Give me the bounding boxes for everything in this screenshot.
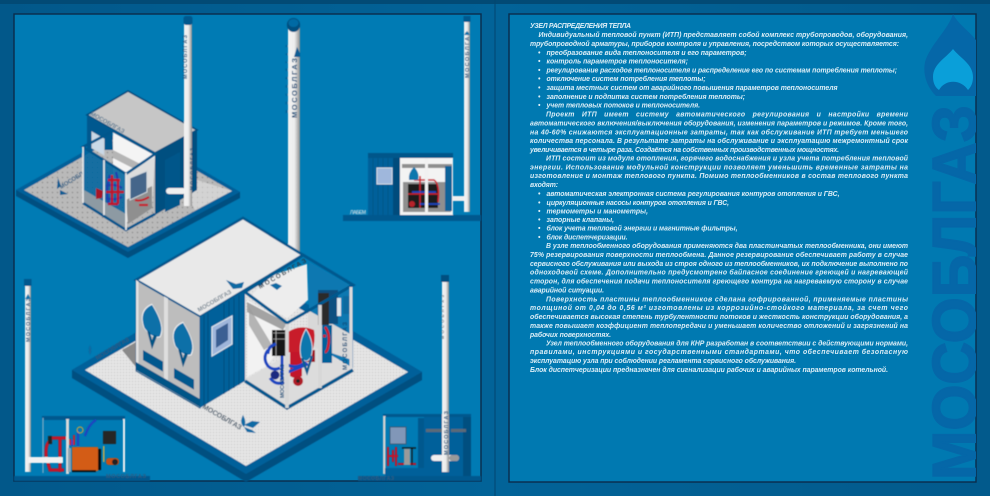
list: functions: • <box>538 68 541 74</box>
list: components: циркуляционные насосы контуров отопления и ГВС, <box>546 200 729 207</box>
large chimney <box>285 18 300 252</box>
building roof <box>136 218 303 317</box>
paragraph: project: Проект ИТП имеет систему автоматического регулирования и настройки времени <box>546 110 909 118</box>
list: functions: • <box>538 102 541 110</box>
paragraph: plates: толщиной от 0,04 до 0,56 м² изготовлены из коррозийно-стойкого материала, за счет чего <box>530 304 908 312</box>
paragraph: plates: обеспечивается высокая степень турбулентности потоков и жесткость конструкции оборудования, а <box>530 313 908 321</box>
paragraph: project <box>529 110 909 154</box>
paragraph: exchangers: сторон, для обеспечения подачи теплоносителя греющего контура на нагреваемую сторону в случае <box>530 278 908 286</box>
body text <box>529 23 909 374</box>
paragraph: intro: Индивидуальный тепловой пункт (ИТП) представляет собой комплекс трубопроводов, оборудования, <box>538 31 908 39</box>
side view: bottom left <box>14 279 150 481</box>
list: components: термометры и манометры, <box>546 208 648 215</box>
paragraph: project: автоматического включения/выключения оборудования, изменения параметров и режимов. Кроме того, <box>530 120 908 128</box>
list: functions: регулирование расходов теплоносителя и распределение его по системам потребления теплоты; <box>546 66 897 74</box>
side view: bottom right <box>358 275 481 482</box>
title: УЗЕЛ РАСПРЕДЕЛЕНИЯ ТЕПЛА <box>530 23 631 30</box>
list: functions: • <box>538 76 541 83</box>
small chimney with stub <box>166 16 194 206</box>
logo drop on equipment <box>300 329 312 361</box>
list: components: запорные клапаны, <box>546 217 614 224</box>
boiler <box>72 431 119 472</box>
large isometric unit <box>72 218 422 482</box>
list: functions: защита местных систем от аварийного повышения параметров теплоносителя <box>546 84 838 92</box>
list: functions: • <box>538 94 541 101</box>
paragraph: project: на 40-60% снижаются эксплуатационные затраты, так как обслуживание ИТП требует меньшего <box>530 128 908 136</box>
paragraph: composition: энергии. Использование модульной конструкции позволяет уменьшить временные затраты на <box>530 164 908 172</box>
small chimney with stub: МОСОБЛГАЗ <box>183 35 189 79</box>
list: components: • <box>538 191 541 198</box>
heat exchanger equipment <box>265 327 315 386</box>
paragraph: composition <box>530 154 909 189</box>
side view: bottom right: МОСОБЛГАЗ <box>444 411 450 455</box>
list: components: • <box>538 234 541 241</box>
door logo 1 <box>142 299 162 355</box>
building: small <box>83 91 197 230</box>
pipework <box>46 420 96 472</box>
paragraph: compliance: Узел теплообменного оборудования для КНР разработан в соответствии с действующими нормами, <box>546 339 908 347</box>
watermark: logo and company name: МОСОБЛГАЗ <box>921 105 990 480</box>
paragraph: exchangers <box>530 242 909 294</box>
panel: right description <box>509 14 990 482</box>
panel: left isometric views <box>14 14 481 482</box>
paragraph: compliance: правилами, инструкциями и государственными стандартами, что обеспечивает безопасную <box>530 348 908 356</box>
list: components: • <box>538 217 541 224</box>
list: functions: учет тепловых потоков и теплоносителя. <box>546 102 700 110</box>
logo on platform front <box>201 404 260 433</box>
icon: logo drop <box>924 14 976 96</box>
side view: top right: ЛАБЕМ <box>350 210 366 216</box>
list: functions: преобразование вида теплоносителя и его параметров; <box>546 49 746 57</box>
list: functions: • <box>538 85 541 92</box>
open bay <box>245 255 353 410</box>
pipework <box>388 447 416 466</box>
side view: bottom right: МОСОБЛГАЗ <box>358 476 394 482</box>
poster <box>212 316 232 356</box>
door wall <box>136 280 200 408</box>
list: functions: • <box>538 58 541 66</box>
paragraph: plates: Поверхность пластины теплообменников сделана гофрированной, применяемые пластины <box>546 296 908 304</box>
paragraph: project: количества персонала. В результате затраты на обслуживание и эксплуатацию межремонтный срок <box>530 137 908 145</box>
side view: bottom left: МОСОБЛГАЗ <box>26 297 32 342</box>
list: components: блок диспетчеризации. <box>546 233 628 241</box>
paragraph: plates <box>529 296 908 339</box>
poster <box>92 132 104 155</box>
frame labels: МОСОБЛГАЗ <box>343 322 349 370</box>
small chimney with stub: МОСОБЛГАЗ <box>189 148 194 190</box>
paragraph: exchangers: аварийной ситуации. <box>530 286 604 294</box>
paragraph: compliance <box>530 339 908 374</box>
list: functions: отключение систем потребления теплоты; <box>546 75 706 83</box>
side view: top right <box>343 16 481 221</box>
back equipment <box>318 290 350 363</box>
side view: bottom right: МОСОБЛГАЗ <box>440 295 445 339</box>
paragraph: intro: трубопроводной арматуры, приборов контроля и управления, посредством которых осуществляется: <box>530 40 899 48</box>
paragraph: composition: ИТП состоит из модуля отопления, горячего водоснабжения и узла учета потребления тепловой <box>546 154 909 162</box>
large chimney: МОСОБЛГАЗ <box>285 44 289 113</box>
paragraph: composition: входят: <box>530 181 558 189</box>
paragraph: plates: рабочих поверхностях. <box>529 331 611 339</box>
paragraph: project: увеличивается в четыре раза. Создаётся на собственных производственных мощностях. <box>529 146 839 154</box>
side view: bottom left: МОСОБЛГАЗ <box>106 474 147 480</box>
list: components: • <box>538 208 541 215</box>
frame labels <box>197 258 349 398</box>
equipment <box>96 172 149 206</box>
platform: large <box>72 268 422 482</box>
list: components: • <box>538 226 541 232</box>
platform: small <box>16 127 240 258</box>
list: functions: заполнение и подпитка систем потребления теплоты; <box>546 93 745 101</box>
shadow on platform <box>122 342 136 367</box>
small isometric unit <box>16 16 240 258</box>
paragraph: exchangers: 75% резервирования поверхности теплообмена. Данное резервирование обеспечивает работу в случае <box>530 251 908 259</box>
list: functions: контроль параметров теплоносителя; <box>546 58 688 66</box>
list: components: • <box>538 200 541 207</box>
list: components: автоматическая электронная система регулирования контуров отопления и ГВС, <box>546 191 840 198</box>
paragraph: exchangers: одноходовой схеме. Дополнительно предусмотрено байпасное соединение греющей и нагревающей <box>530 269 909 277</box>
logo on platform back left: МОСОБЛГАЗ <box>95 337 131 362</box>
side equipment <box>408 167 440 208</box>
large chimney: МОСОБЛГАЗ <box>290 58 299 118</box>
poster <box>377 168 392 184</box>
paragraph: exchangers: В узле теплообменного оборудования применяются два пластинчатых теплообменника, они имеют <box>546 242 908 250</box>
logo on platform front: МОСОБЛГАЗ <box>201 404 243 432</box>
bay frame <box>245 255 353 323</box>
list: components: блок учета тепловой энергии и магнитные фильтры, <box>546 224 738 232</box>
paragraph: intro <box>530 31 908 48</box>
frame <box>83 131 155 230</box>
frame labels: МОСОБЛГАЗ <box>280 363 286 398</box>
watermark: logo and company name <box>924 14 976 477</box>
paragraph: plates: также повышает коэффициент теплопередачи и уменьшает количество отложений и загрязнений на <box>530 322 908 330</box>
paragraph: exchangers: сервисного обслуживания или выхода из строя одного из теплообменников, их подключение выполнено по <box>530 260 908 268</box>
list: functions: • <box>538 50 541 57</box>
side view: top right: МОСОБЛГАЗ <box>465 32 471 78</box>
list: functions <box>538 49 897 110</box>
frame labels: МОСОБЛГАЗ <box>197 289 233 314</box>
poster <box>390 427 406 444</box>
paragraph: compliance: Блок диспетчеризации предназначен для сигнализации рабочих и аварийных параметров котельной. <box>530 366 888 374</box>
building: small: МОСОБЛГАЗ <box>89 112 125 135</box>
list: components <box>538 191 840 241</box>
paragraph: composition: изготовление и монтаж теплового пункта. Помимо теплообменников в состав теплового пункта <box>530 172 908 180</box>
paragraph: compliance: эксплуатацию узла при соблюдении регламента сервисного обслуживания. <box>530 357 796 365</box>
frame labels: МОСОБЛГАЗ <box>258 258 308 291</box>
logo on small platform: МОСОБЛ <box>59 171 85 191</box>
door logo 2 <box>173 317 193 373</box>
ribbed blue wall <box>200 291 245 408</box>
